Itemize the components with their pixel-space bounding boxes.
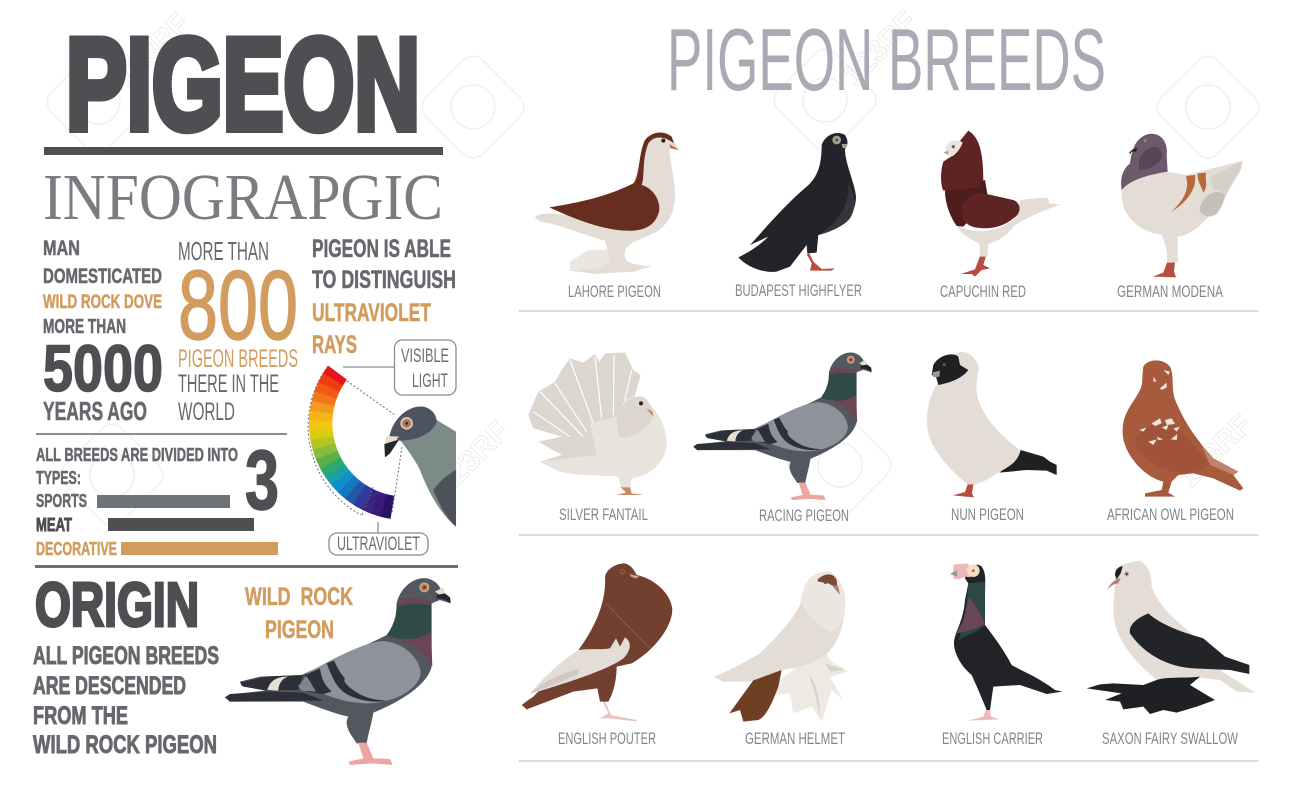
subtitle: INFOGRAPGIC: INFOGRAPGIC (43, 161, 443, 234)
panel: breed types bar chart: DECORATIVE (36, 539, 117, 559)
panel: origin text: FROM THE (33, 702, 128, 730)
bird: german helmet (714, 571, 848, 722)
text: 123RF (109, 7, 196, 94)
bird: english carrier (950, 563, 1062, 721)
label: english pouter: ENGLISH POUTER (558, 729, 656, 748)
bird: silver fantail (528, 353, 667, 495)
text block: 800 breeds fact (178, 236, 298, 426)
text block: domestication fact: YEARS AGO (43, 396, 147, 426)
text block: ultraviolet fact (312, 235, 456, 359)
label: wild rock pigeon: PIGEON (265, 616, 334, 644)
label: lahore pigeon: LAHORE PIGEON (568, 282, 661, 301)
label: nun pigeon: NUN PIGEON (951, 505, 1024, 524)
icon: pigeon head with eye (384, 407, 456, 527)
text: 123RF (1172, 408, 1259, 495)
panel: origin text: WILD ROCK PIGEON (33, 731, 217, 759)
panel: origin text (33, 571, 219, 759)
label: silver fantail: SILVER FANTAIL (559, 505, 648, 524)
bird: saxon fairy swallow (1087, 561, 1255, 714)
panel: breed types bar chart: ALL BREEDS ARE DIVIDED INTO (36, 445, 238, 465)
label: wild rock pigeon: WILD ROCK (245, 583, 353, 611)
title: PIGEON: PIGEON (66, 11, 420, 157)
panel: origin text: ORIGIN (35, 571, 199, 640)
callout: visible light (343, 340, 456, 395)
chart: colour spectrum vision arc (286, 303, 526, 544)
text block: 800 breeds fact: MORE THAN (178, 236, 269, 266)
text block: domestication fact (43, 237, 163, 426)
label: german helmet: GERMAN HELMET (745, 729, 845, 748)
text: 123RF (836, 5, 923, 92)
text block: 800 breeds fact: 800 (178, 250, 298, 360)
text block: ultraviolet fact: ULTRAVIOLET (312, 299, 431, 327)
label: german modena: GERMAN MODENA (1117, 282, 1223, 301)
bird: nun pigeon (927, 352, 1057, 497)
label: saxon fairy swallow: SAXON FAIRY SWALLOW (1102, 729, 1238, 748)
panel: breed types bar chart: SPORTS (36, 491, 87, 511)
label: capuchin red: CAPUCHIN RED (940, 282, 1026, 301)
text block: domestication fact: DOMESTICATED (43, 265, 162, 288)
bird: capuchin red (941, 131, 1060, 277)
text block: domestication fact: MORE THAN (43, 316, 126, 338)
label: racing pigeon: RACING PIGEON (759, 506, 849, 525)
bird: african owl pigeon (1123, 360, 1243, 497)
text block: 800 breeds fact: THERE IN THE (178, 370, 279, 398)
panel: origin text: ARE DESCENDED (33, 672, 186, 700)
panel: breed types bar chart: MEAT (36, 515, 72, 535)
bird: racing pigeon (693, 352, 872, 500)
text: 123RF (429, 415, 516, 502)
callout: ultraviolet (329, 522, 428, 555)
text block: 800 breeds fact: PIGEON BREEDS (178, 345, 298, 373)
text block: ultraviolet fact: RAYS (312, 331, 357, 359)
label: african owl pigeon: AFRICAN OWL PIGEON (1107, 505, 1234, 524)
callout: visible light: VISIBLE (401, 346, 449, 367)
text block: 800 breeds fact: WORLD (178, 398, 235, 426)
panel: breed types bar chart (36, 433, 279, 559)
callout: visible light: LIGHT (412, 371, 448, 392)
bird: german modena (1121, 134, 1243, 277)
text block: ultraviolet fact: PIGEON IS ABLE (312, 235, 451, 263)
panel: origin text: ALL PIGEON BREEDS (33, 642, 219, 670)
bird: lahore pigeon (535, 133, 679, 274)
text block: domestication fact: MAN (43, 237, 80, 260)
bird: budapest highflyer (738, 133, 856, 272)
panel: breed types bar chart: 3 (245, 433, 279, 527)
label: english carrier: ENGLISH CARRIER (942, 729, 1043, 748)
panel: breed types bar chart: TYPES: (36, 468, 81, 488)
title underline (44, 147, 443, 155)
callout: ultraviolet: ULTRAVIOLET (337, 534, 420, 555)
bird: english pouter (522, 563, 672, 721)
bird: wild rock pigeon (225, 578, 451, 765)
text block: domestication fact: 5000 (43, 331, 163, 405)
text block: ultraviolet fact: TO DISTINGUISH (312, 266, 456, 294)
label: wild rock pigeon (245, 583, 353, 644)
label: budapest highflyer: BUDAPEST HIGHFLYER (735, 281, 862, 300)
text block: domestication fact: WILD ROCK DOVE (43, 292, 162, 313)
